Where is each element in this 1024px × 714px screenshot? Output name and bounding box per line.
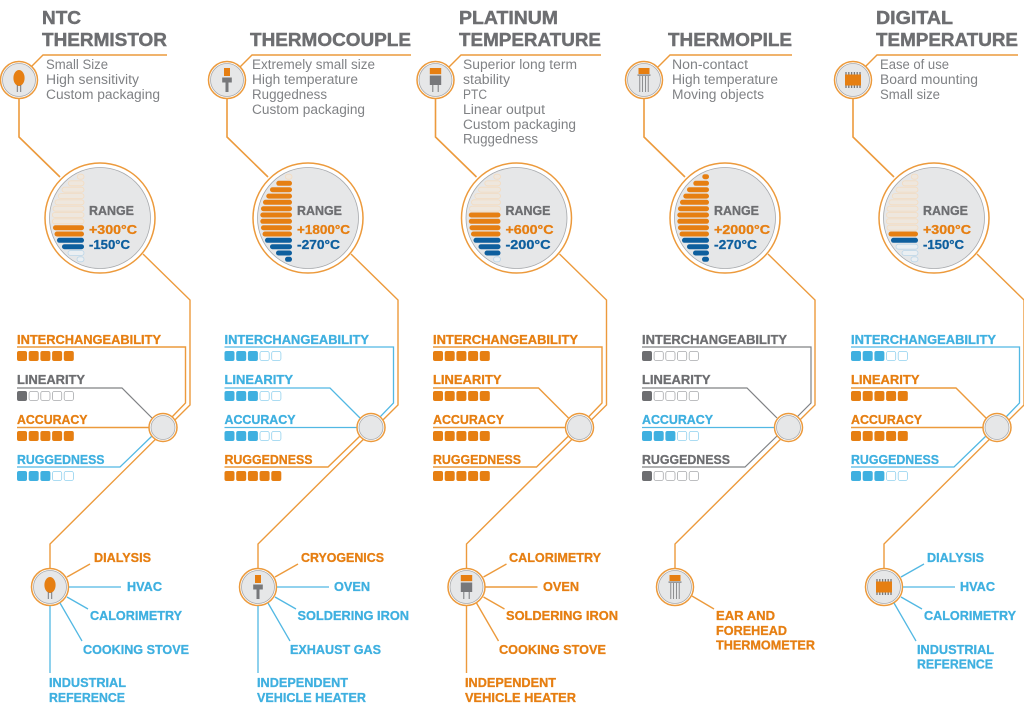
range gauge: -200°C xyxy=(506,237,551,252)
range gauge xyxy=(45,163,155,273)
text block: features: Superior long term xyxy=(463,57,577,72)
rating: ruggedness: RUGGEDNESS xyxy=(851,452,939,467)
rating: linearity xyxy=(224,372,360,418)
range gauge xyxy=(253,163,363,273)
icon: platinum sensor xyxy=(417,62,454,98)
applications list: REFERENCE xyxy=(49,690,125,705)
heading: NTC thermistor: NTC xyxy=(42,8,81,28)
text block: features: High sensitivity xyxy=(46,72,139,87)
rating: interchangeability xyxy=(433,332,602,417)
rating: interchangeability: INTERCHANGEABILITY xyxy=(642,332,787,347)
rating: ruggedness: RUGGEDNESS xyxy=(224,452,313,467)
applications list: DIALYSIS xyxy=(927,550,984,565)
rating: ruggedness: RUGGEDNESS xyxy=(433,452,521,467)
applications list: CALORIMETRY xyxy=(509,550,601,565)
text block: features: Custom packaging xyxy=(252,102,365,117)
heading: platinum temperature: PLATINUM xyxy=(459,8,558,28)
range gauge: +2000°C xyxy=(714,222,771,237)
applications list: VEHICLE HEATER xyxy=(257,690,367,705)
rating: linearity xyxy=(433,372,568,418)
connector: icon to range xyxy=(19,99,60,177)
applications list: DIALYSIS xyxy=(94,550,151,565)
rating: linearity: LINEARITY xyxy=(851,372,920,387)
text block: features: Custom packaging xyxy=(463,117,576,132)
applications list xyxy=(894,550,1016,672)
icon: NTC sensor xyxy=(0,62,38,98)
range gauge: RANGE xyxy=(506,203,551,218)
rating: accuracy: ACCURACY xyxy=(433,412,504,427)
applications list: COOKING STOVE xyxy=(499,642,606,657)
text block: features: Small Size xyxy=(46,57,108,72)
connector: heading to icon xyxy=(658,55,792,67)
heading: thermocouple: THERMOCOUPLE xyxy=(250,30,411,50)
hub circle xyxy=(983,414,1011,442)
heading: digital temperature xyxy=(876,8,1018,50)
rating: linearity xyxy=(17,372,152,418)
text block: features: Ease of use xyxy=(880,57,949,72)
connector: range to applications xyxy=(258,254,398,569)
applications list: EAR AND xyxy=(716,608,775,623)
text block: features xyxy=(46,57,160,102)
rating: interchangeability xyxy=(642,332,811,417)
heading: platinum temperature: TEMPERATURE xyxy=(459,30,601,50)
text block: features: Small size xyxy=(880,87,940,102)
applications list: INDUSTRIAL xyxy=(49,675,126,690)
applications list: CALORIMETRY xyxy=(90,608,182,623)
range gauge: -270°C xyxy=(714,237,758,252)
rating: ruggedness: RUGGEDNESS xyxy=(642,452,730,467)
applications list: HVAC xyxy=(127,579,163,594)
rating: accuracy xyxy=(224,412,357,441)
rating: interchangeability: INTERCHANGEABILITY xyxy=(433,332,578,347)
icon: digital sensor xyxy=(834,62,872,98)
applications list: SOLDERING IRON xyxy=(298,608,409,623)
applications list xyxy=(257,550,409,705)
rating: interchangeability: INTERCHANGEABILITY xyxy=(224,332,369,347)
rating: ruggedness xyxy=(642,436,777,481)
range gauge: RANGE xyxy=(923,203,968,218)
rating: interchangeability: INTERCHANGEABILITY xyxy=(17,332,161,347)
text block: features: Custom packaging xyxy=(46,87,160,102)
rating: accuracy: ACCURACY xyxy=(224,412,296,427)
connector: range to applications xyxy=(50,254,190,569)
text block: features: Ruggedness xyxy=(463,132,538,146)
rating: linearity: LINEARITY xyxy=(224,372,293,387)
rating: ruggedness xyxy=(433,436,568,481)
icon: thermocouple sensor xyxy=(208,62,246,98)
text block: features: Moving objects xyxy=(672,87,764,102)
rating: interchangeability xyxy=(224,332,394,417)
text block: features: Extremely small size xyxy=(252,57,375,72)
rating: ruggedness xyxy=(17,436,152,481)
range gauge: +300°C xyxy=(89,222,138,237)
rating: linearity xyxy=(851,372,986,418)
text block: features: Linear output xyxy=(463,102,545,117)
applications list xyxy=(692,596,816,652)
rating: interchangeability xyxy=(17,332,186,417)
applications list: INDEPENDENT xyxy=(257,675,348,690)
applications list: CRYOGENICS xyxy=(301,550,384,565)
icon: applications hub xyxy=(448,568,485,606)
applications list: OVEN xyxy=(334,579,370,594)
range gauge: RANGE xyxy=(297,203,342,218)
applications list: EXHAUST GAS xyxy=(290,642,381,657)
text block: features: Ruggedness xyxy=(252,87,327,102)
rating: accuracy xyxy=(642,412,774,441)
hub circle xyxy=(149,414,177,442)
connector: range to applications xyxy=(466,254,606,569)
column: platinum temperature xyxy=(417,8,618,705)
heading: NTC thermistor: THERMISTOR xyxy=(42,30,167,50)
range gauge xyxy=(670,163,780,273)
hub circle xyxy=(357,414,385,442)
text block: features: Non-contact xyxy=(672,57,748,72)
range gauge: -150°C xyxy=(923,237,965,252)
rating: interchangeability xyxy=(851,332,1020,417)
rating: ruggedness xyxy=(224,436,360,481)
applications list: COOKING STOVE xyxy=(83,642,189,657)
range gauge: RANGE xyxy=(714,203,759,218)
applications list: HVAC xyxy=(960,579,996,594)
rating: accuracy xyxy=(433,412,566,441)
range gauge xyxy=(879,163,989,273)
range gauge: RANGE xyxy=(89,203,134,218)
connector: icon to range xyxy=(436,99,476,177)
text block: features xyxy=(672,57,778,102)
heading: digital temperature: DIGITAL xyxy=(876,8,953,28)
rating: accuracy: ACCURACY xyxy=(642,412,713,427)
rating: ruggedness xyxy=(851,436,986,481)
rating: ruggedness: RUGGEDNESS xyxy=(17,452,105,467)
applications list: FOREHEAD xyxy=(716,623,787,638)
column: thermopile xyxy=(626,30,816,652)
applications list: INDUSTRIAL xyxy=(917,642,994,657)
range gauge: -150°C xyxy=(89,237,131,252)
applications list: VEHICLE HEATER xyxy=(465,690,577,705)
text block: features: PTC xyxy=(463,87,487,102)
rating: accuracy xyxy=(17,412,149,441)
rating: linearity: LINEARITY xyxy=(642,372,711,387)
applications list: SOLDERING IRON xyxy=(506,608,618,623)
connector: range to applications xyxy=(884,254,1024,569)
range gauge: -270°C xyxy=(297,237,341,252)
column: digital temperature xyxy=(834,8,1024,672)
heading: thermopile: THERMOPILE xyxy=(668,30,792,50)
range gauge xyxy=(462,163,572,273)
rating: interchangeability: INTERCHANGEABILITY xyxy=(851,332,996,347)
text block: features: High temperature xyxy=(672,72,778,87)
rating: linearity: LINEARITY xyxy=(433,372,502,387)
text block: features: High temperature xyxy=(252,72,358,87)
column: NTC thermistor xyxy=(0,8,190,705)
connector: icon to range xyxy=(853,99,894,177)
applications list: INDEPENDENT xyxy=(465,675,556,690)
rating: linearity: LINEARITY xyxy=(17,372,85,387)
heading: NTC thermistor xyxy=(42,8,167,50)
applications list xyxy=(49,550,189,705)
text block: features xyxy=(252,57,375,117)
connector: heading to icon xyxy=(31,55,167,67)
rating: accuracy: ACCURACY xyxy=(851,412,922,427)
hub circle xyxy=(774,414,802,442)
range gauge: +1800°C xyxy=(297,222,351,237)
connector: range to applications xyxy=(675,254,815,569)
applications list: THERMOMETER xyxy=(716,638,816,652)
text block: features: stability xyxy=(463,72,510,87)
connector: icon to range xyxy=(644,99,685,177)
range gauge: +600°C xyxy=(506,222,554,237)
heading: platinum temperature xyxy=(459,8,601,50)
icon: applications hub xyxy=(240,568,276,606)
connector: heading to icon xyxy=(449,55,601,67)
applications list: CALORIMETRY xyxy=(924,608,1016,623)
column: thermocouple xyxy=(208,30,411,705)
rating: linearity xyxy=(642,372,777,418)
icon: applications hub xyxy=(866,568,902,606)
rating: accuracy xyxy=(851,412,983,441)
text block: features xyxy=(880,57,978,102)
connector: icon to range xyxy=(227,99,268,177)
hub circle xyxy=(566,414,594,442)
icon: thermopile sensor xyxy=(626,62,662,98)
icon: applications hub xyxy=(656,568,694,606)
text block: features: Board mounting xyxy=(880,72,978,87)
range gauge: +300°C xyxy=(923,222,972,237)
applications list: REFERENCE xyxy=(917,656,993,672)
connector: heading to icon xyxy=(865,55,1018,67)
rating: accuracy: ACCURACY xyxy=(17,412,88,427)
icon: applications hub xyxy=(32,568,68,606)
heading: digital temperature: TEMPERATURE xyxy=(876,30,1018,50)
text block: features xyxy=(463,57,577,146)
applications list xyxy=(465,550,618,705)
applications list: OVEN xyxy=(543,579,579,594)
connector: heading to icon xyxy=(240,55,411,67)
